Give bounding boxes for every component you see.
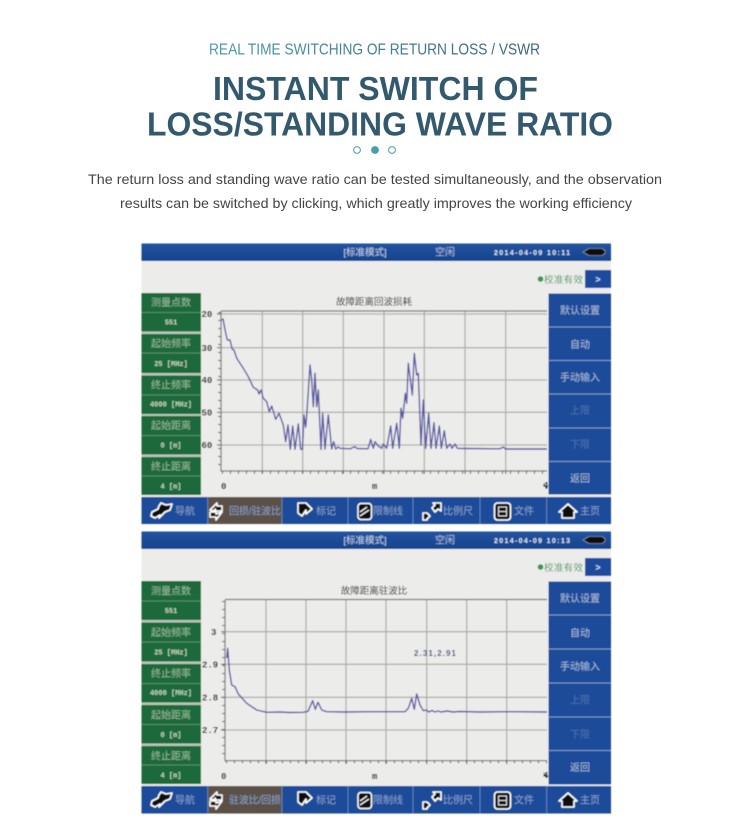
left parameter panel: 起始频率 [151,626,191,639]
right menu panel [548,294,611,494]
chart: return loss vs distance: m [372,482,378,492]
chart: VSWR vs distance: 故障距离驻波比 [341,585,407,597]
icon: file [494,503,510,520]
left parameter panel: 25 [MHz] [154,361,188,369]
bottom navigation bar [142,786,611,814]
chart: VSWR vs distance: 4 [543,771,549,781]
chart: return loss vs distance: 4 [543,481,549,491]
icon: scale arrows [423,792,441,809]
right menu panel: 下限 [570,729,590,741]
left parameter panel: 起始距离 [151,419,191,432]
chart: return loss vs distance: 20 [202,310,212,320]
calibration status: > [595,562,601,572]
left parameter panel: 551 [165,608,177,616]
chart: return loss vs distance: 故障距离回波损耗 [336,296,412,308]
pagination dots [354,146,395,154]
status bar [142,532,611,549]
left parameter panel: 0 [m] [160,732,182,740]
icon: file [494,792,510,809]
right menu panel: 下限 [570,439,590,451]
bottom navigation bar: 驻波比/回损 [229,794,281,806]
right menu panel: 上限 [570,405,590,417]
bottom navigation bar: 限制线 [373,794,403,806]
bottom navigation bar: 文件 [514,504,534,518]
left parameter panel: 测量点数 [151,296,191,309]
chart: VSWR vs distance: m [372,772,378,782]
bottom navigation bar: 主页 [580,506,600,518]
left parameter panel: 终止距离 [151,460,191,473]
icon: navigation [151,792,172,807]
status bar: 空闲 [435,246,455,258]
calibration status: 校准有效 [544,274,583,286]
bottom navigation bar: 标记 [316,506,336,518]
left parameter panel: 4000 [MHz] [150,402,192,410]
status bar: 2014-04-09 10:13 [494,538,570,545]
chart: return loss vs distance: 50 [202,408,212,418]
subtitle: REAL TIME SWITCHING OF RETURN LOSS / VSWR [209,42,540,58]
icon: switch arrows [210,503,222,520]
status bar: [标准模式] [343,246,387,258]
left parameter panel: 4000 [MHz] [150,690,192,698]
chart: VSWR vs distance: 2.9 [202,660,218,670]
description text: The return loss and standing wave ratio can be tested simultaneously, and the observation [88,171,662,187]
right menu panel: 默认设置 [560,592,600,605]
bottom navigation bar [142,497,611,524]
chart: VSWR vs distance [202,585,549,782]
calibration status [538,270,611,288]
chart: VSWR vs distance: 2.8 [202,694,218,704]
bottom navigation bar: 限制线 [373,504,403,518]
left parameter panel: 起始频率 [151,337,191,350]
right menu panel: 返回 [570,473,590,485]
icon: limit line [358,504,372,520]
description text: results can be switched by clicking, which greatly improves the working efficiency [120,195,632,211]
calibration status [538,558,611,576]
chart: VSWR vs distance: 2.31,2.91 [414,649,457,658]
right menu panel: 自动 [570,626,590,640]
description text [88,171,662,211]
main title: INSTANT SWITCH OF [213,70,538,107]
icon: marker [298,503,312,516]
left parameter panel [142,293,201,495]
right menu panel: 默认设置 [560,304,600,317]
chart: VSWR vs distance: 2.7 [202,726,218,736]
panel: return loss screen [142,244,611,524]
status bar: [标准模式] [343,534,387,546]
bottom navigation bar: 回损/驻波比 [229,504,281,518]
icon: home [559,793,577,807]
bottom navigation bar: 导航 [175,504,195,518]
left parameter panel [142,581,201,784]
left parameter panel: 终止距离 [151,750,191,762]
left parameter panel: 4 [m] [160,772,182,780]
bottom navigation bar: 主页 [580,794,600,806]
left parameter panel: 0 [m] [160,442,182,450]
status bar: 2014-04-09 10:11 [494,250,570,257]
icon: navigation [151,503,172,518]
chart: return loss vs distance [202,296,549,492]
status bar: 空闲 [435,534,455,546]
right menu panel: 上限 [570,694,590,706]
main title: LOSS/STANDING WAVE RATIO [147,106,613,142]
bottom navigation bar: 导航 [175,794,195,806]
panel: VSWR screen [142,532,611,814]
right menu panel: 手动输入 [560,371,600,384]
left parameter panel: 25 [MHz] [154,650,188,658]
chart: return loss vs distance: 0 [221,482,226,492]
left parameter panel: 终止频率 [151,378,191,392]
status bar [142,244,611,261]
right menu panel: 返回 [570,762,590,774]
bottom navigation bar: 文件 [514,794,534,806]
right menu panel: 手动输入 [560,660,600,673]
left parameter panel: 551 [165,320,177,328]
left parameter panel: 测量点数 [151,584,191,598]
calibration status: 校准有效 [544,562,583,574]
icon: home [559,504,577,518]
main title [147,70,613,142]
icon: limit line [358,792,372,808]
chart: VSWR vs distance: 0 [221,772,226,782]
right menu panel: 自动 [570,338,590,351]
chart: return loss vs distance: 40 [202,376,212,386]
bottom navigation bar: 比例尺 [443,794,473,806]
left parameter panel: 4 [m] [160,484,182,492]
chart: return loss vs distance: 60 [202,441,212,451]
left parameter panel: 起始距离 [151,708,191,722]
icon: switch arrows [210,792,222,809]
icon: scale arrows [423,503,441,520]
left parameter panel: 终止频率 [151,667,191,680]
icon: marker [298,792,312,805]
chart: VSWR vs distance: 3 [211,628,216,638]
bottom navigation bar: 比例尺 [443,504,473,518]
calibration status: > [595,274,601,284]
right menu panel [548,582,611,784]
chart: return loss vs distance: 30 [202,344,212,354]
bottom navigation bar: 标记 [316,794,336,806]
